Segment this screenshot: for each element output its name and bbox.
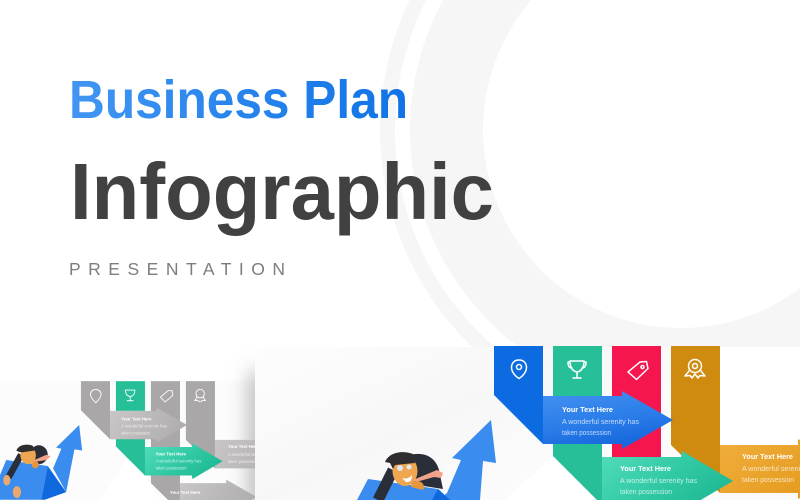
background circles [380, 0, 800, 431]
panel: left slide thumbnail: Your Text Here [121, 416, 152, 421]
icon: price tag [628, 362, 648, 380]
panel: left slide thumbnail [0, 381, 255, 500]
text: green arrow: taken possession [620, 487, 672, 496]
text: blue arrow [562, 405, 639, 437]
column: orange [671, 346, 720, 493]
panel: left slide thumbnail: Your Text Here [228, 444, 259, 449]
arrow: blue [543, 391, 673, 449]
panel: left slide background [0, 381, 255, 500]
panel: right slide [357, 346, 800, 500]
panel: left slide thumbnail: A wonderful serenity has [156, 458, 202, 463]
panel: left slide thumbnail: taken possession [156, 466, 187, 471]
text: blue arrow: A wonderful serenity has [562, 417, 639, 426]
text: orange arrow: Your Text Here [742, 452, 793, 461]
text: orange arrow [742, 452, 800, 484]
icon: location pin [512, 360, 526, 378]
icon: person in box [357, 452, 450, 500]
icon: rising blue arrow [444, 420, 496, 500]
text: blue arrow: taken possession [562, 428, 611, 437]
subtitle: Presentation: PRESENTATION [69, 259, 285, 279]
panel: left slide thumbnail: A wonderful serenity has [121, 423, 168, 428]
text: blue arrow: Your Text Here [562, 405, 613, 414]
text: green arrow [620, 464, 697, 496]
text: orange arrow: taken possession [742, 475, 794, 484]
panel: left slide thumbnail: taken possession [228, 459, 259, 464]
column: green [553, 346, 602, 500]
icon: trophy [568, 361, 586, 378]
column: blue [494, 346, 543, 444]
text: green arrow: Your Text Here [620, 464, 671, 473]
panel: left slide thumbnail: Your Text Here [170, 490, 201, 495]
title: Infographic: Infographic [70, 147, 494, 236]
panel: left slide thumbnail: taken possession [121, 431, 151, 436]
panel: left slide edge shadow [252, 372, 266, 500]
panel: left slide thumbnail: A wonderful serenity has [228, 452, 274, 457]
arrow: green [602, 451, 733, 500]
column: red [612, 346, 661, 458]
title: Business Plan: Business Plan [69, 70, 408, 130]
panel: left slide thumbnail: Your Text Here [156, 451, 186, 456]
text: green arrow: A wonderful serenity has [620, 476, 697, 485]
icon: ribbon badge [685, 360, 705, 378]
arrow: orange [720, 439, 800, 499]
